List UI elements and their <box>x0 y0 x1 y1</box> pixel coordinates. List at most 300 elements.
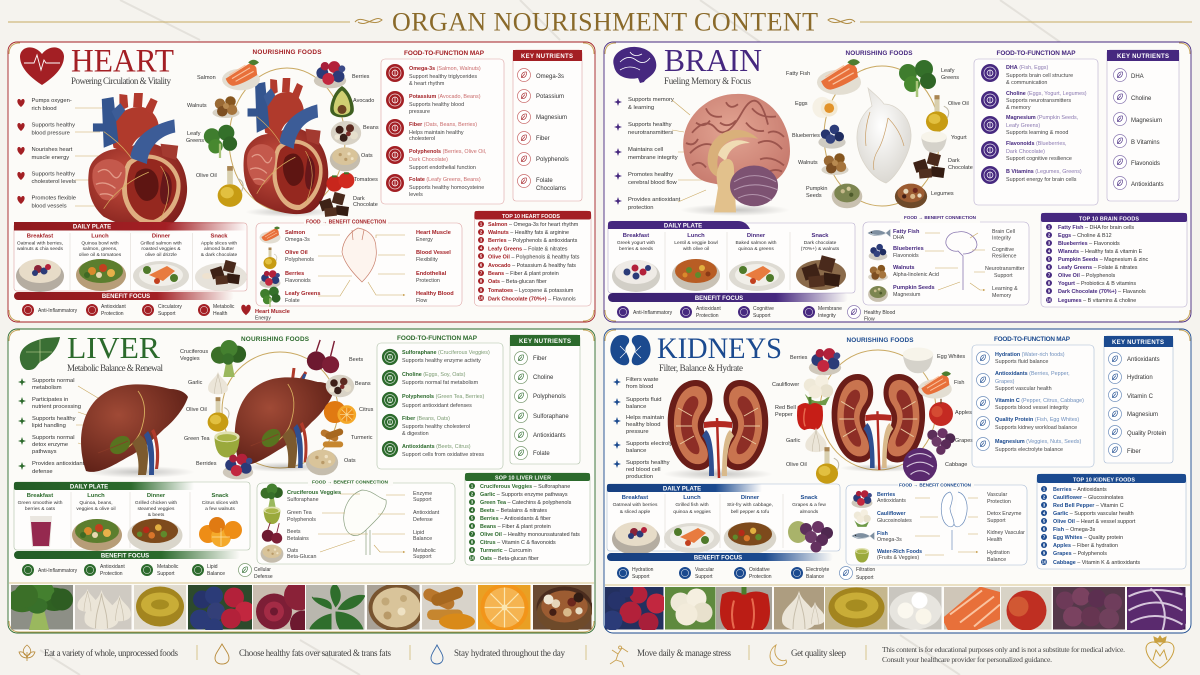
top 10 foods: Red Bell Pepper – Vitamin C <box>1053 503 1124 509</box>
organ function list: detox enzyme <box>32 442 68 448</box>
daily plate: Oatmeal with berries, <box>17 240 63 246</box>
top 10 foods: Legumes – B vitamins & choline <box>1058 298 1136 304</box>
food to benefit connection: Flow <box>416 298 427 304</box>
food to benefit connection: Cruciferous Veggies <box>287 490 341 496</box>
top 10 foods: Garlic – Supports vascular health <box>1053 511 1134 517</box>
panel: heart <box>8 42 595 322</box>
food ring items: Green Tea <box>184 436 211 442</box>
food to benefit connection: Support <box>413 497 432 503</box>
daily plate: Breakfast <box>27 493 53 499</box>
organ function list: nutrient processing <box>32 404 81 410</box>
food-to-function map: levels <box>409 192 423 198</box>
key nutrients: Chocolams <box>536 186 566 192</box>
food-to-function map: Leafy Greens) <box>1006 123 1040 129</box>
key nutrients: Antioxidants <box>1127 357 1160 363</box>
food to benefit connection: Support <box>994 273 1013 279</box>
food-to-function map: & digestion <box>402 431 429 437</box>
icon: brain <box>613 47 656 83</box>
food to benefit connection: Support <box>413 554 432 560</box>
food ring items <box>186 60 379 217</box>
top 10 foods <box>465 473 590 565</box>
key nutrients: Folate <box>533 451 550 457</box>
daily plate: Grilled fish with <box>675 502 709 508</box>
food-to-function map: Supports normal fat metabolism <box>402 380 479 386</box>
nourishing foods heading: NOURISHING FOODS <box>241 336 310 343</box>
benefit focus <box>607 553 875 581</box>
top 10 foods: TOP 10 BRAIN FOODS <box>1079 216 1139 222</box>
food-to-function map heading: FOOD-TO-FUNCTION MAP <box>994 336 1071 343</box>
daily plate: Quinoa bowl with <box>81 240 119 246</box>
food to benefit connection: Oats <box>287 548 299 554</box>
top 10 foods: Walnuts – Healthy fats & arginine <box>488 230 569 236</box>
key nutrients: Magnesium <box>1131 118 1162 124</box>
food ring items: Olive Oil <box>196 173 217 179</box>
food-to-function map: Support vascular health <box>995 386 1052 392</box>
top 10 foods: 3 <box>1048 240 1051 246</box>
daily plate: Breakfast <box>622 495 648 501</box>
food ring items: Dark <box>948 158 960 164</box>
food to benefit connection: Pumpkin Seeds <box>893 285 935 291</box>
daily plate: steamed veggies <box>138 506 175 512</box>
icon: leaf <box>19 645 35 661</box>
daily plate: Dinner <box>152 234 171 240</box>
top 10 foods: 10 <box>1042 560 1047 564</box>
top 10 foods: Garlic – Supports enzyme pathways <box>480 492 568 498</box>
food to benefit connection: FOOD → BENEFIT CONNECTION <box>899 482 972 488</box>
daily plate: & beets <box>148 512 165 518</box>
organ function list: lipid handling <box>32 423 66 429</box>
benefit focus: BENEFIT FOCUS <box>102 294 150 300</box>
food-to-function map: Omega-3s (Salmon, Walnuts) <box>409 66 481 72</box>
icon: drop <box>215 644 229 664</box>
top 10 foods: 6 <box>1043 526 1046 532</box>
food to benefit connection: Folate <box>285 298 300 304</box>
food-to-function map: Support energy for brain cells <box>1006 177 1077 183</box>
organ function list <box>614 97 712 211</box>
top 10 foods: 6 <box>471 524 474 528</box>
food to benefit connection: Memory <box>992 293 1011 299</box>
benefit focus: BENEFIT FOCUS <box>101 554 149 560</box>
benefit focus: Circulatory <box>158 304 182 310</box>
top 10 foods: Eggs – Choline & B12 <box>1058 233 1112 239</box>
top 10 foods: SOP 10 LIVER LIVER <box>495 476 551 482</box>
key nutrients: Flavonoids <box>1131 161 1160 167</box>
food to benefit connection: Blood Vessel <box>416 250 451 256</box>
benefit focus: Hydration <box>632 567 654 573</box>
benefit focus: Anti-Inflammatory <box>38 308 78 314</box>
organ function list: blood pressure <box>32 130 70 136</box>
top 10 foods: 5 <box>1043 518 1046 524</box>
food-to-function map: Folate (Leafy Greens, Beans) <box>409 177 481 183</box>
food ring items: Yogurt <box>951 135 967 141</box>
top 10 foods: Leafy Greens – Folate & nitrates <box>1058 265 1138 271</box>
organ function list: balance <box>626 404 646 410</box>
food to benefit connection: DHA <box>893 235 905 241</box>
food-to-function map: Support cells from oxidative stress <box>402 452 484 458</box>
illustration: anatomical heart cross-section <box>80 93 204 234</box>
panel: liver <box>7 329 595 636</box>
benefit focus: Membrane <box>818 306 842 312</box>
illustration: heart with food ring <box>229 68 345 217</box>
top 10 foods: 3 <box>1043 502 1046 508</box>
key nutrients: Fiber <box>536 136 550 142</box>
title: ORGAN NOURISHMENT CONTENT <box>392 8 818 36</box>
food-to-function map: Supports brain cell structure <box>1006 73 1073 79</box>
organ function list: balance <box>626 448 646 454</box>
panel: brain <box>604 42 1191 322</box>
organ function list: Promotes healthy <box>628 172 673 178</box>
key nutrients: Fiber <box>1127 449 1141 455</box>
top 10 foods: 5 <box>480 254 483 258</box>
top 10 foods: 9 <box>1043 550 1046 556</box>
top 10 foods: 1 <box>1043 486 1046 492</box>
food to benefit connection: Cauliflower <box>877 511 906 517</box>
food to benefit connection: Defense <box>413 517 433 523</box>
key nutrients: Magnesium <box>536 115 567 121</box>
logo: crowned heart <box>1146 636 1174 668</box>
key nutrients: KEY NUTRIENTS <box>521 54 573 60</box>
organ function list: Supports fluid <box>626 397 661 403</box>
food to benefit connection: Green Tea <box>287 510 312 516</box>
daily plate: DAILY PLATE <box>663 486 701 492</box>
key nutrients: Folate <box>536 178 553 184</box>
food-to-function map: Polyphenols (Green Tea, Berries) <box>402 394 485 400</box>
benefit focus: Metabolic <box>157 564 179 570</box>
heading: HEART <box>71 44 174 80</box>
food ring items: Berries <box>790 355 808 361</box>
daily plate <box>607 484 840 555</box>
daily plate: Snack <box>811 233 829 239</box>
top 10 foods: Tomatoes – Lycopene & potassium <box>488 288 574 294</box>
benefit focus: Support <box>158 311 176 317</box>
food-to-function map: Supports fluid balance <box>995 359 1048 365</box>
photo strip: kidney foods <box>602 576 1190 644</box>
food-to-function map: DHA (Fish, Eggs) <box>1006 65 1048 71</box>
top 10 foods: Olive Oil – Heart & vessel support <box>1053 519 1136 525</box>
key nutrients: Magnesium <box>1127 412 1158 418</box>
food-to-function map: Choline (Eggs, Soy, Oats) <box>402 372 466 378</box>
food to benefit connection: Protection <box>987 499 1011 505</box>
daily plate: berries & seeds <box>619 246 654 252</box>
organ function list: Pumps oxygen- <box>32 98 72 104</box>
food ring items: Chocolate <box>948 165 973 171</box>
subtitle: Fueling Memory & Focus <box>664 76 751 86</box>
food ring items: Greens <box>941 75 959 81</box>
food to benefit connection: Support <box>987 518 1006 524</box>
daily plate: quinoa & greens <box>738 246 774 252</box>
food-to-function map: Magnesium (Veggies, Nuts, Seeds) <box>995 439 1081 445</box>
food-to-function map: Dark Chocolate) <box>1006 149 1045 155</box>
food to benefit connection: Metabolic <box>413 548 436 554</box>
benefit focus: Protection <box>749 574 772 580</box>
key nutrients: KEY NUTRIENTS <box>1117 54 1169 60</box>
food-to-function map: Helps maintain healthy <box>409 130 464 136</box>
food ring items: Eggs <box>795 101 808 107</box>
food ring items: Cruciferous <box>180 349 208 355</box>
food to benefit connection: Enzyme <box>413 491 432 497</box>
icon: water drop <box>431 645 443 664</box>
top 10 foods: Cruciferous Veggies – Sulforaphane <box>480 484 570 490</box>
food to benefit connection: Magnesium <box>893 292 921 298</box>
food-to-function map: Support endothelial function <box>409 165 476 171</box>
top 10 foods: Olive Oil – Healthy monounsaturated fats <box>480 532 580 538</box>
top 10 foods: Berries – Antioxidants & fiber <box>480 516 551 522</box>
illustration: kidneys <box>663 380 773 480</box>
benefit focus: Filtration <box>856 567 875 573</box>
daily plate: almond butter <box>204 246 234 252</box>
top 10 foods: 6 <box>1048 264 1051 270</box>
food ring items: Tomatoes <box>354 177 378 183</box>
food-to-function map: Supports healthy homocysteine <box>409 185 484 191</box>
top 10 foods: Wlanuts – Healthy fats & vitamin E <box>1058 249 1143 255</box>
food to benefit connection: Learning & <box>992 286 1018 292</box>
food ring items: Pumpkin <box>806 186 827 192</box>
food ring items: Cabbage <box>945 462 967 468</box>
food-to-function map <box>381 59 504 204</box>
tip: hydration: Stay hydrated throughout the day <box>454 648 566 658</box>
daily plate: olive oil drizzle <box>145 252 177 258</box>
food ring items: Cauliflower <box>772 382 799 388</box>
food-to-function map: Grapes) <box>995 379 1015 385</box>
food ring items: Turmeric <box>351 435 373 441</box>
top 10 foods: Beans – Fiber & plant protein <box>488 271 559 277</box>
organ function list: Supports normal <box>32 378 75 384</box>
illustration: white heart with food ring <box>824 66 940 206</box>
benefit focus: Anti-Inflammatory <box>633 310 673 316</box>
key nutrients: Polyphenols <box>533 394 566 400</box>
food to benefit connection <box>256 218 462 307</box>
organ function list: blood vessels <box>32 204 67 210</box>
organ function list <box>18 378 110 475</box>
food to benefit connection <box>257 478 455 564</box>
top 10 foods: Leafy Greens – Folate & nitrates <box>488 246 568 252</box>
key nutrients: Polyphenols <box>536 157 569 163</box>
tip: healthy fats: Choose healthy fats over saturated & trans fats <box>239 648 391 658</box>
top 10 foods: Oats – Beta-glucan fiber <box>488 279 547 285</box>
benefit focus: Support <box>157 571 175 577</box>
daily plate: Quinoa, beans, <box>79 500 113 506</box>
food to benefit connection <box>846 481 1027 565</box>
daily plate: Apple slices with <box>201 240 237 246</box>
food ring items: Leafy <box>187 131 201 137</box>
daily plate: Lentil & veggie bowl <box>674 240 718 246</box>
food ring items: Pepper <box>775 412 793 418</box>
food-to-function map: Supports electrolyte balance <box>995 447 1063 453</box>
food to benefit connection: Hydration <box>987 550 1010 556</box>
top 10 foods: Pumpkin Seeds – Magnesium & zinc <box>1058 257 1148 263</box>
organ function list: Provides antioxidant <box>628 197 681 203</box>
daily plate: a few walnuts <box>205 506 235 512</box>
benefit focus: Cognitive <box>753 306 774 312</box>
top 10 foods: 9 <box>1048 288 1051 294</box>
top 10 foods: 4 <box>1048 248 1051 254</box>
nourishing foods heading: NOURISHING FOODS <box>846 50 913 57</box>
food-to-function map: Polyphenols (Berries, Olive Oil, <box>409 149 487 155</box>
subtitle: Powering Circulation & Vitality <box>71 76 172 86</box>
food ring items: Walnuts <box>187 103 207 109</box>
disclaimer: This content is for educational purposes only and is not a substitute for medical advice. <box>882 645 1125 654</box>
food to benefit connection: Antioxidants <box>877 498 906 504</box>
food ring items: Leafy <box>941 68 955 74</box>
daily plate: DAILY PLATE <box>73 224 111 230</box>
key nutrients: Vitamin C <box>1127 394 1154 400</box>
food-to-function map: cholesterol <box>409 136 435 142</box>
food to benefit connection: Flavonoids <box>893 253 919 259</box>
key nutrients: Omega-3s <box>536 74 564 80</box>
food to benefit connection: Beets <box>287 529 301 535</box>
daily plate: (70%+) & walnuts <box>801 246 840 252</box>
top 10 foods: 7 <box>1043 534 1046 540</box>
daily plate: Dinner <box>747 233 766 239</box>
top 10 foods: 5 <box>471 516 474 520</box>
daily plate: DAILY PLATE <box>664 224 702 230</box>
photo strip: liver foods <box>7 580 594 636</box>
food to benefit connection: Lipid <box>413 530 424 536</box>
food to benefit connection: Omega-3s <box>285 237 310 243</box>
benefit focus: Antioxidant <box>100 564 125 570</box>
top 10 foods: Egg Whites – Quality protein <box>1053 535 1123 541</box>
food-to-function map heading: FOOD-TO-FUNCTION MAP <box>404 50 485 57</box>
organ function list: red blood cell <box>626 467 660 473</box>
food to benefit connection: Glucosinolates <box>877 518 912 524</box>
food to benefit connection: Resilience <box>992 254 1016 260</box>
icon: kidneys <box>610 335 651 365</box>
food to benefit connection: Flavonoids <box>285 278 311 284</box>
food-to-function map: Flavonoids (Blueberries, <box>1006 141 1067 147</box>
top 10 foods: Avocado – Potassium & healthy fats <box>488 263 576 269</box>
food to benefit connection: Blueberries <box>893 246 924 252</box>
food-to-function map: Support cognitive resilience <box>1006 156 1072 162</box>
top 10 foods: TOP 10 HEART FOODS <box>502 214 560 220</box>
top 10 foods: 10 <box>1047 298 1052 302</box>
food ring items: Citrus <box>359 407 374 413</box>
daily plate: Breakfast <box>623 233 649 239</box>
benefit focus: Protection <box>100 571 123 577</box>
benefit focus <box>608 293 895 322</box>
daily plate: Lunch <box>683 495 701 501</box>
benefit focus: Electrolyte <box>806 567 830 573</box>
key nutrients: Choline <box>533 375 554 381</box>
daily plate: Lunch <box>87 493 105 499</box>
organ function list: Maintains cell <box>628 147 663 153</box>
food ring items: Beans <box>355 381 371 387</box>
food to benefit connection: Endothelial <box>416 271 447 277</box>
food-to-function map: Fiber (Beans, Oats) <box>402 416 450 422</box>
food ring items: Olive Oil <box>186 407 207 413</box>
food ring items: Seeds <box>806 193 822 199</box>
food to benefit connection <box>863 214 1029 305</box>
key nutrients: B Vitamins <box>1131 140 1160 146</box>
subtitle: Filter, Balance & Hydrate <box>659 363 743 373</box>
food to benefit connection: Betalains <box>287 536 309 542</box>
food-to-function map: B Vitamins (Legumes, Greens) <box>1006 169 1082 175</box>
food to benefit connection: Berries <box>877 492 895 498</box>
food to benefit connection: Health <box>987 537 1002 543</box>
top 10 foods: 10 <box>479 296 484 300</box>
organ function list: Nourishes heart <box>32 147 73 153</box>
food to benefit connection: Fatty Fish <box>893 229 920 235</box>
food-to-function map: Antioxidants (Berries, Pepper, <box>995 371 1070 377</box>
top 10 foods: 2 <box>471 492 474 496</box>
food-to-function map: Fiber (Oats, Beans, Berries) <box>409 122 477 128</box>
food-to-function map: Antioxidants (Beets, Citrus) <box>402 444 471 450</box>
food to benefit connection: (Fruits & Veggies) <box>877 555 919 561</box>
food to benefit connection: Walnuts <box>893 265 915 271</box>
daily plate: bell pepper & tofu <box>731 509 769 515</box>
food to benefit connection: Sulforaphane <box>287 497 319 503</box>
organ function list: & learning <box>628 105 654 111</box>
food ring items: Egg Whites <box>937 354 965 360</box>
top 10 foods <box>1037 474 1186 569</box>
benefit focus: Healthy Blood <box>864 310 895 316</box>
daily plate: Snack <box>800 495 818 501</box>
daily plate: Lunch <box>91 234 109 240</box>
food-to-function map: Dark Chocolate) <box>409 157 448 163</box>
top 10 foods: 2 <box>1048 232 1051 238</box>
top 10 foods <box>1041 213 1187 307</box>
food ring items: Garlic <box>188 380 203 386</box>
benefit focus: BENEFIT FOCUS <box>694 556 742 562</box>
organ function list: rich blood <box>32 106 57 112</box>
tip: move: Move daily & manage stress <box>637 648 731 658</box>
food to benefit connection: Cognitive <box>992 247 1014 253</box>
food-to-function map: Supports neurotransmitters <box>1006 98 1071 104</box>
daily plate: veggies & olive oil <box>76 506 116 512</box>
food-to-function map <box>972 345 1094 467</box>
organ function list: healthy blood <box>626 422 660 428</box>
top 10 foods: 2 <box>480 230 483 234</box>
key nutrients: Antioxidants <box>533 433 566 439</box>
benefit focus: Defense <box>254 574 273 580</box>
food-to-function map: Supports healthy cholesterol <box>402 424 470 430</box>
top 10 foods: 7 <box>480 270 483 276</box>
top 10 foods: Fish – Omega-3s <box>1053 527 1096 533</box>
organ function list: Supports healthy <box>32 172 75 178</box>
organ function list: protection <box>628 205 653 211</box>
benefit focus: Cellular <box>254 567 271 573</box>
food to benefit connection: Flexibility <box>416 257 438 263</box>
top 10 foods: 9 <box>471 548 474 552</box>
food to benefit connection: FOOD → BENEFIT CONNECTION <box>312 480 389 486</box>
key nutrients: DHA <box>1131 74 1144 80</box>
key nutrients: Sulforaphane <box>533 414 569 420</box>
top 10 foods: 8 <box>471 540 474 544</box>
food to benefit connection: Fish <box>877 531 888 537</box>
food to benefit connection: Salmon <box>285 230 306 236</box>
food ring items: Berrides <box>196 461 217 467</box>
food to benefit connection: Beta-Glucan <box>287 554 316 560</box>
organ function list: Provides antioxidant <box>32 461 85 467</box>
food-to-function map: Hydration (Water-rich foods) <box>995 352 1065 358</box>
food to benefit connection: FOOD → BENEFIT CONNECTION <box>306 220 386 226</box>
food-to-function map: Supports blood vessel integrity <box>995 405 1069 411</box>
benefit focus: Lipid <box>207 564 218 570</box>
top 10 foods: 3 <box>471 500 474 504</box>
key nutrients <box>1104 336 1173 463</box>
top 10 foods: 1 <box>480 222 483 226</box>
top 10 foods: 8 <box>1048 280 1051 286</box>
organ function list <box>613 377 677 480</box>
food ring items: Olive Oil <box>786 462 807 468</box>
daily plate: & sliced apple <box>620 509 651 515</box>
food ring items <box>180 340 374 479</box>
organ function list: Supports memory <box>628 97 674 103</box>
top 10 foods: Berries – Antioxidants <box>1053 487 1107 493</box>
subtitle: Metabolic Balance & Renewal <box>67 363 163 373</box>
key nutrients: Choline <box>1131 96 1152 102</box>
food-to-function map <box>974 59 1098 205</box>
food to benefit connection: Polyphenols <box>285 257 314 263</box>
